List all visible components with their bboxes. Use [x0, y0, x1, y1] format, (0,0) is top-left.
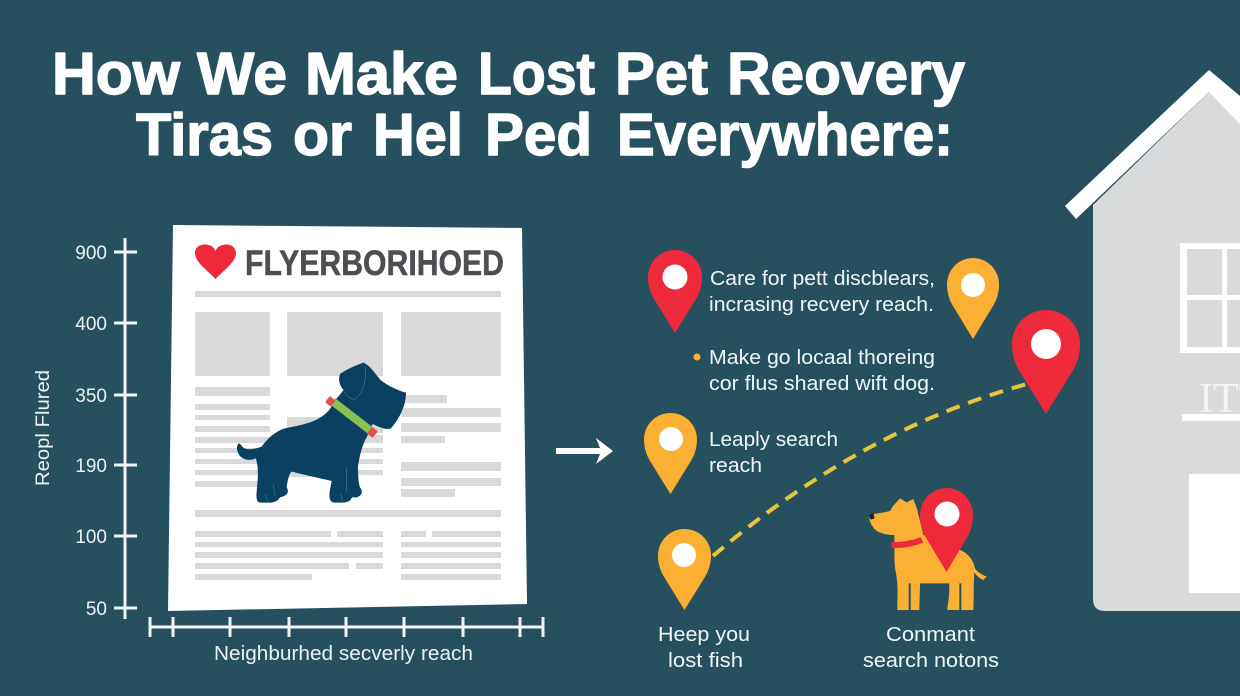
- dog collar: [325, 396, 378, 438]
- icon: large red pin: [1012, 310, 1080, 414]
- flyer text placeholder bars: [195, 291, 501, 580]
- panel: flyer: [168, 225, 527, 611]
- y axis: [114, 238, 137, 619]
- text: make go local: [709, 346, 935, 395]
- text: heep you: lost fish: [668, 649, 743, 672]
- text: leaply search: [709, 428, 838, 477]
- building window: [1180, 243, 1240, 353]
- y axis tick labels: 50: [86, 599, 107, 620]
- title: Tiras: [136, 102, 273, 168]
- icon: bullet dot: [694, 354, 700, 360]
- text: heep you: [658, 623, 750, 672]
- title: Ped: [485, 102, 592, 168]
- text: conmant: [863, 623, 999, 672]
- title: Pet: [615, 41, 708, 107]
- arrow: [556, 438, 613, 464]
- text: make go local: Make go locaal thoreing: [709, 346, 935, 369]
- title: Make: [305, 41, 458, 107]
- icon: yellow pin 1: [947, 258, 999, 339]
- chart axes: [33, 238, 544, 665]
- title: [52, 41, 965, 168]
- text: leaply search: reach: [709, 454, 762, 477]
- y axis tick labels: 350: [75, 386, 107, 407]
- title: or: [293, 102, 352, 168]
- building roof: [1065, 70, 1240, 219]
- dashed route line: [713, 384, 1027, 556]
- icon: navy dog: [237, 363, 406, 503]
- icon: heart: [195, 244, 236, 279]
- text: make go local: cor flus shared wift dog.: [709, 372, 935, 395]
- y axis tick labels: 900: [75, 243, 107, 264]
- x axis: [150, 617, 544, 637]
- y axis tick labels: [75, 243, 107, 620]
- y axis title: Reopl Flured: [33, 370, 54, 486]
- title: Everywhere:: [617, 102, 953, 168]
- text: conmant: search notons: [863, 649, 999, 672]
- building door: [1189, 474, 1240, 593]
- icon: yellow pin 3: [658, 529, 711, 610]
- text: care for pet: Care for pett discblears,: [710, 267, 935, 290]
- text: conmant: Conmant: [886, 623, 975, 646]
- title: Hel: [373, 102, 463, 168]
- icon: red pin 1: [648, 250, 702, 333]
- text: care for pet: incrasing recvery reach.: [709, 293, 934, 316]
- y axis tick labels: 400: [75, 314, 107, 335]
- flyer heading: FLYERBORIHOED: [245, 244, 504, 283]
- y axis tick labels: 100: [75, 527, 107, 548]
- text: care for pet: [709, 267, 935, 316]
- y axis tick labels: 190: [75, 456, 107, 477]
- title: Reovery: [727, 41, 965, 107]
- title: Lost: [478, 41, 595, 107]
- title: We: [197, 41, 287, 107]
- text: heep you: Heep you: [658, 623, 750, 646]
- icon: yellow pin 2: [644, 413, 697, 494]
- icon: building: [1065, 70, 1240, 611]
- text: leaply search: Leaply search: [709, 428, 838, 451]
- icon: yellow dog with pin: [868, 488, 987, 610]
- x axis title: Neighburhed secverly reach: [214, 643, 473, 665]
- title: How: [52, 41, 180, 107]
